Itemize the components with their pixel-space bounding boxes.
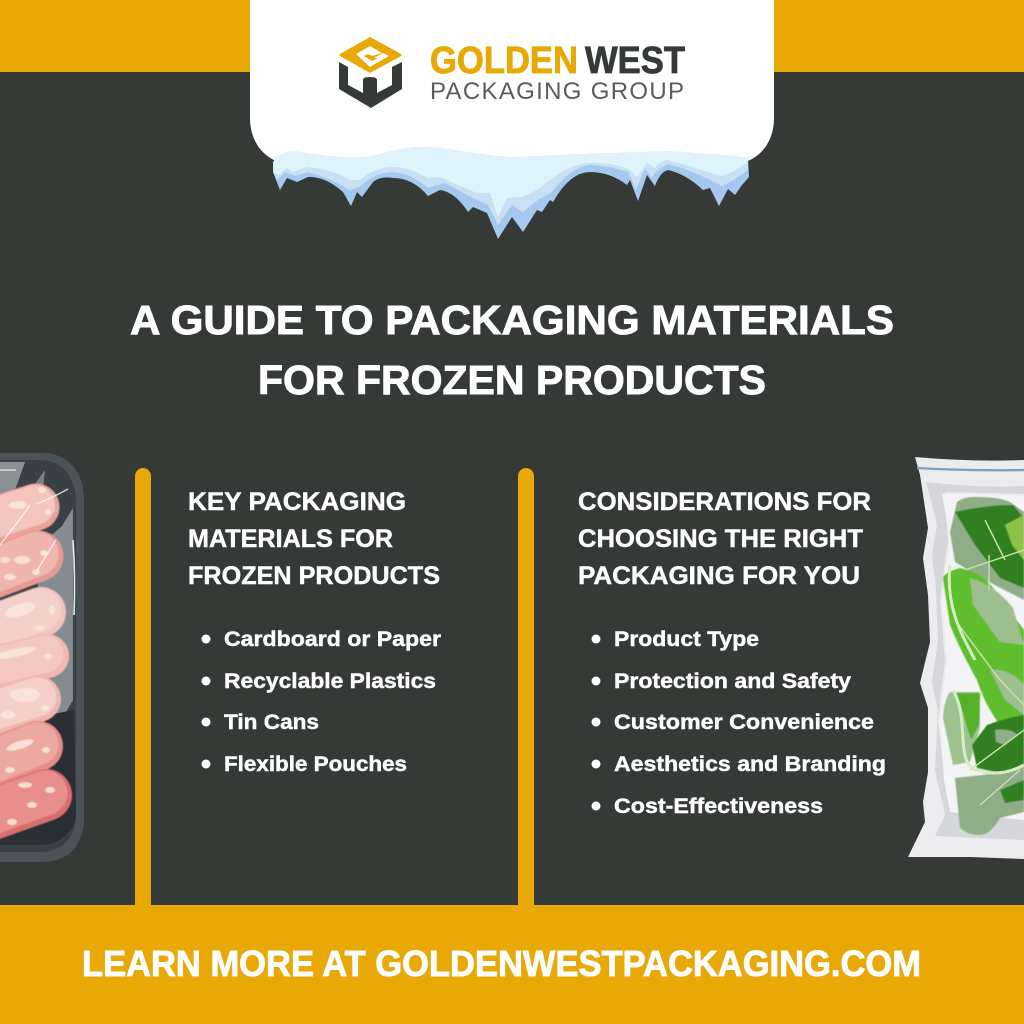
heading: [188, 488, 440, 590]
logo wordmark: West: WEST: [585, 40, 685, 82]
panel: key packaging materials: [135, 468, 441, 905]
bullet list: Aesthetics and Branding: [614, 753, 886, 776]
panel: considerations: [518, 468, 886, 905]
illustration: sausage tray: [0, 453, 84, 862]
sausage highlights: [0, 487, 55, 825]
footer call to action: LEARN MORE AT GOLDENWESTPACKAGING.COM: [82, 943, 921, 984]
bullet list: Tin Cans: [224, 711, 319, 734]
top gold band: [0, 0, 1024, 72]
title: A GUIDE TO PACKAGING MATERIALS: [130, 297, 894, 343]
heading: CONSIDERATIONS FOR: [578, 488, 871, 516]
bullet list: Recyclable Plastics: [224, 670, 436, 693]
bullet list: Protection and Safety: [614, 670, 851, 693]
heading: KEY PACKAGING: [188, 488, 406, 516]
bullet list: [202, 628, 441, 776]
icon: logo cube: [339, 37, 402, 108]
heading: PACKAGING FOR YOU: [578, 562, 860, 590]
bullet list: Customer Convenience: [614, 711, 874, 734]
bullet list: Cardboard or Paper: [224, 628, 441, 651]
heading: [578, 488, 871, 590]
title: FOR FROZEN PRODUCTS: [258, 357, 766, 403]
sausages: [0, 505, 47, 822]
bullet list: [592, 628, 886, 818]
heading: MATERIALS FOR: [188, 525, 393, 553]
gold divider bar: [135, 468, 151, 905]
leaf veins: [955, 520, 1024, 805]
title: [130, 297, 894, 403]
footer band: [0, 905, 1024, 1024]
icon: icicles: [273, 147, 749, 239]
film reflections: [0, 489, 68, 575]
tray body: [0, 453, 84, 862]
heading: CHOOSING THE RIGHT: [578, 525, 863, 553]
bullet list: Flexible Pouches: [224, 753, 407, 776]
logo wordmark: Golden: GOLDEN: [430, 40, 578, 82]
logo tagline: PACKAGING GROUP: [430, 78, 684, 105]
bullet list: Cost-Effectiveness: [614, 795, 823, 818]
gold divider bar: [518, 468, 534, 905]
bag body: [908, 457, 1024, 859]
illustration: spinach bag: [908, 457, 1024, 859]
logo: [339, 37, 685, 108]
bullet list: Product Type: [614, 628, 759, 651]
white logo panel: [250, 0, 774, 164]
leaves: [943, 497, 1024, 835]
heading: FROZEN PRODUCTS: [188, 562, 440, 590]
